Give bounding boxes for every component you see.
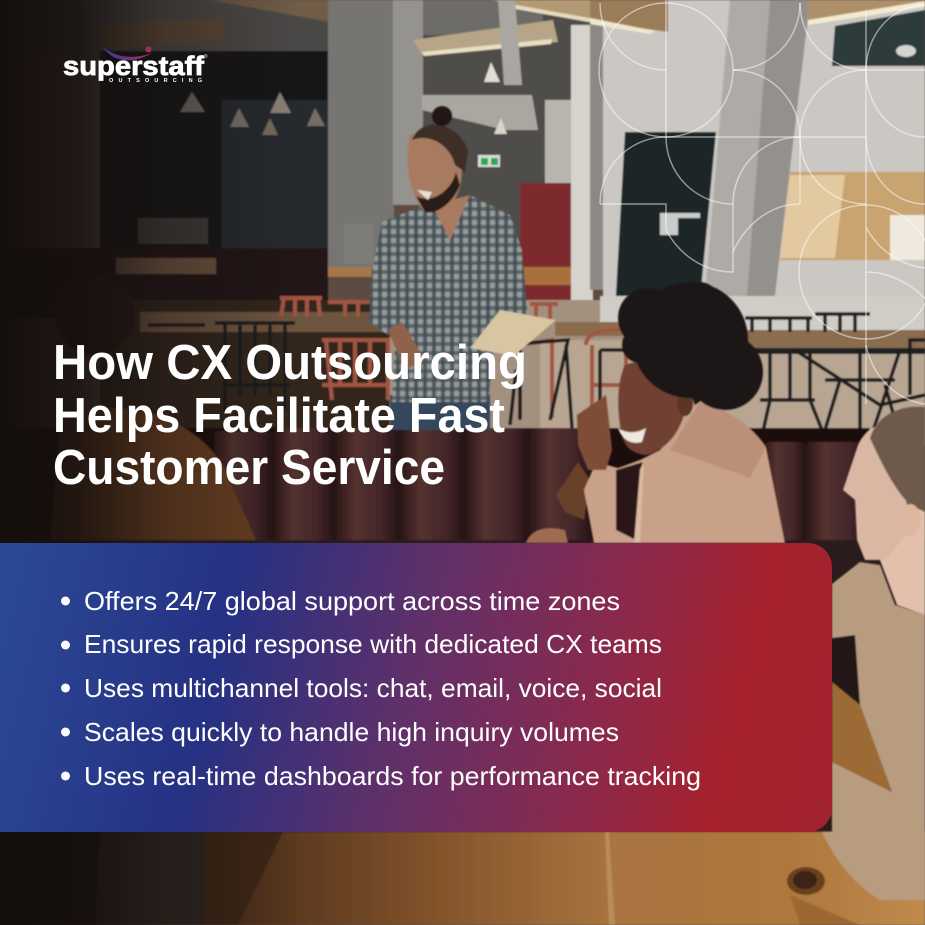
- bullet list of benefits: Uses real-time dashboards for performance tracking: [84, 761, 701, 791]
- dark left-side shading over the photo: [0, 0, 300, 925]
- decorative outline lattice at top right: [599, 0, 925, 404]
- mechanical ceiling with ducts and planks: [423, 0, 588, 270]
- cafe chairs: [280, 298, 626, 418]
- bullet list of benefits: Ensures rapid response with dedicated CX teams: [84, 629, 662, 659]
- title: Customer Service: [53, 441, 445, 495]
- photo figure: seated man in pink hoodie: [526, 282, 785, 543]
- panel: gradient benefits list: [0, 543, 832, 832]
- bullet list of benefits: Offers 24/7 global support across time zones: [84, 586, 620, 616]
- bottom table and lower area: [0, 540, 925, 840]
- floor and tables: [100, 300, 925, 445]
- leather booth: [0, 428, 870, 548]
- bullet list of benefits: [61, 586, 701, 791]
- title: [53, 336, 527, 495]
- right wall, door, column and window: [603, 0, 925, 335]
- logo: superstaff outsourcing: ®: [204, 53, 208, 60]
- photo figure: standing man in plaid shirt: [369, 106, 556, 430]
- left ceiling and wall: [0, 0, 400, 60]
- title: Helps Facilitate Fast: [53, 389, 505, 443]
- logo: superstaff outsourcing: superstaff: [63, 51, 205, 81]
- logo: superstaff outsourcing: OUTSOURCING: [109, 78, 202, 84]
- title: How CX Outsourcing: [53, 336, 527, 390]
- photo figure: seated woman at right: [822, 407, 925, 900]
- bullet list of benefits: Uses multichannel tools: chat, email, voice, social: [84, 673, 662, 703]
- bullet list of benefits: Scales quickly to handle high inquiry volumes: [84, 717, 619, 747]
- dark back room with glass wall and pendant lamps: [100, 51, 328, 251]
- hidden figure at left: [55, 275, 135, 355]
